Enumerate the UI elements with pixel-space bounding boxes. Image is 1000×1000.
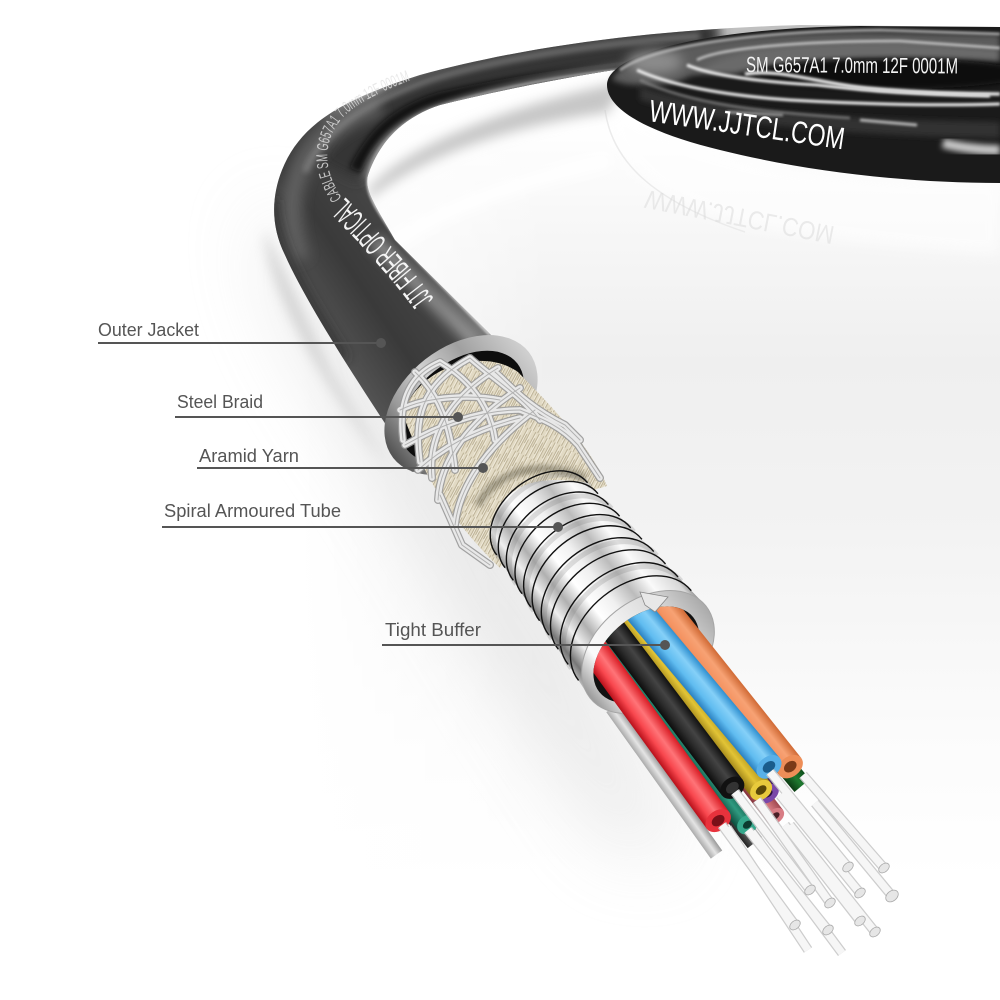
bare glass fibres xyxy=(722,772,901,953)
buffer: green xyxy=(660,606,805,792)
coil print: url: WWW.JJTCL.COM xyxy=(647,93,847,156)
reflection of coil on floor xyxy=(368,78,1000,255)
jacket print text, receding part: CABLE SM G657A1 7.0mm 12F 0001M xyxy=(316,70,410,202)
cable jacket xyxy=(274,25,994,472)
label: outer jacket: Outer Jacket xyxy=(98,320,199,340)
label: aramid yarn xyxy=(197,446,488,473)
label: aramid yarn: Aramid Yarn xyxy=(199,446,299,466)
cast shadow xyxy=(265,200,680,850)
ring notch xyxy=(640,592,668,612)
buffer: pink xyxy=(618,618,784,824)
buffer: purple xyxy=(620,613,779,804)
reflection of coil on floor: WWW.JJTCL.COM xyxy=(642,184,837,250)
buffer: teal xyxy=(601,630,757,834)
buffer: orange xyxy=(648,606,803,778)
label: spiral armoured tube: Spiral Armoured Tube xyxy=(164,501,341,521)
jacket print text, large part: JJT FIBER OPTICAL xyxy=(334,198,433,310)
label: spiral armoured tube xyxy=(162,501,563,532)
buffer: red xyxy=(593,642,731,832)
steel braid xyxy=(400,358,600,565)
aramid yarn xyxy=(403,361,607,568)
buffer: blue xyxy=(628,609,782,779)
tube end ring xyxy=(558,565,738,739)
label: outer jacket xyxy=(98,320,386,348)
coil of cable xyxy=(607,26,1000,183)
buffer: dark grey xyxy=(728,820,762,848)
label: tight buffer: Tight Buffer xyxy=(385,620,481,640)
jacket end ring xyxy=(358,306,564,504)
buffer: yellow xyxy=(618,614,772,800)
buffer: black xyxy=(606,622,744,799)
label: tight buffer xyxy=(382,620,670,650)
label: steel braid: Steel Braid xyxy=(177,392,263,412)
silver inner strip xyxy=(606,704,722,859)
tight buffers bundle xyxy=(593,606,805,848)
spiral armoured tube xyxy=(459,441,738,739)
label: steel braid xyxy=(175,392,463,422)
